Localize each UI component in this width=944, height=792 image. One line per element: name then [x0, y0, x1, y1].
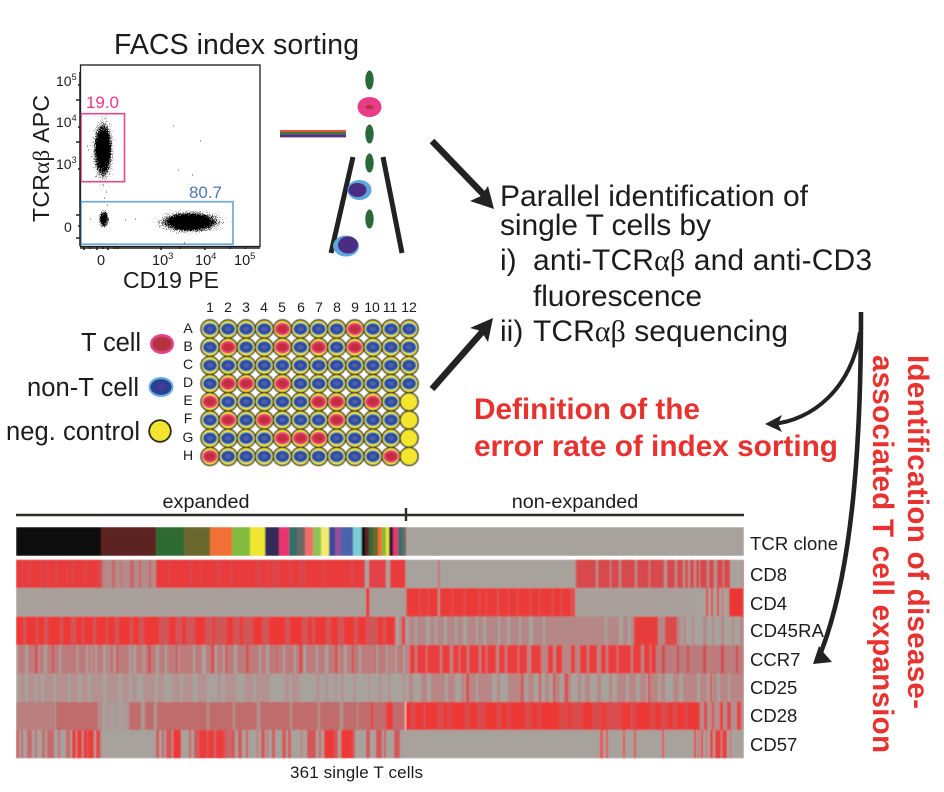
- legend: T cell: T cell: [81, 329, 141, 357]
- gate: T cells: [81, 114, 124, 182]
- plate row letters: E: [183, 392, 193, 408]
- expansion bracket: [16, 491, 744, 521]
- identification text block: anti-TCRαβ and anti-CD3: [533, 244, 872, 277]
- legend: [6, 329, 174, 446]
- plot frame: [80, 65, 260, 246]
- x axis tick labels: [97, 251, 255, 269]
- plate row letters: A: [183, 320, 193, 336]
- plate row letters: D: [183, 374, 193, 390]
- red heading: error rate: error rate of index sorting: [474, 430, 838, 463]
- plate column numbers: [206, 299, 417, 315]
- heatmap: [16, 560, 744, 758]
- x axis tick labels: 10: [152, 253, 168, 269]
- laser beam: [280, 130, 346, 137]
- axis ticks: [76, 72, 260, 250]
- plate column numbers: 8: [333, 299, 341, 315]
- heatmap row labels: CD57: [750, 734, 797, 755]
- plate column numbers: 1: [206, 299, 214, 315]
- row CD8: [16, 560, 744, 588]
- row CD57: [16, 730, 744, 758]
- identification text block: [500, 180, 872, 348]
- y axis title: TCRαβ APC: [28, 95, 54, 222]
- identification text block: single T cells by: [500, 209, 711, 242]
- arrow: plate to identification: [432, 318, 493, 389]
- label non-expanded: non-expanded: [512, 491, 638, 513]
- y axis tick labels: 5: [72, 72, 77, 82]
- identification text block: Parallel identification of: [500, 180, 809, 213]
- plate column numbers: 10: [364, 299, 380, 315]
- plate column numbers: 9: [351, 299, 359, 315]
- y axis tick labels: 10: [56, 73, 72, 89]
- row CD4: [16, 588, 744, 616]
- red heading: error rate: [474, 393, 838, 463]
- identification text block: fluorescence: [533, 280, 702, 313]
- non-T cell droplet upper: [348, 180, 372, 200]
- plate column numbers: 2: [224, 299, 232, 315]
- y axis tick labels: 0: [64, 219, 72, 235]
- T cell droplet: [358, 97, 382, 117]
- red vertical heading: Identification of disease-: [901, 355, 934, 709]
- x axis tick labels: 3: [168, 251, 173, 262]
- identification text block: ii): [500, 315, 523, 348]
- x axis tick labels: 10: [195, 253, 211, 269]
- title: FACS index sorting: FACS index sorting: [114, 29, 359, 61]
- y axis tick labels: 10: [56, 156, 72, 172]
- caption: 361 single T cells: 361 single T cells: [290, 763, 423, 782]
- heatmap row labels: CD45RA: [750, 620, 825, 641]
- plate column numbers: 5: [278, 299, 286, 315]
- stray events: [87, 126, 201, 243]
- plate row letters: B: [183, 338, 193, 354]
- plate column numbers: 6: [297, 299, 305, 315]
- 96 well plate: [183, 299, 418, 465]
- plate column numbers: 3: [242, 299, 250, 315]
- heatmap row labels: [750, 533, 838, 755]
- heatmap row labels: TCR clone: [750, 533, 838, 554]
- red heading: error rate: Definition of the: [474, 393, 700, 426]
- non-T cell droplet lower: [333, 236, 359, 256]
- x axis tick labels: 0: [97, 253, 105, 269]
- heatmap row labels: CD28: [750, 705, 797, 726]
- heatmap row labels: CD8: [750, 564, 787, 585]
- heatmap row labels: CCR7: [750, 649, 800, 670]
- legend: T cell: [81, 329, 174, 357]
- x axis tick labels: 10: [234, 253, 250, 269]
- legend: non-T cell: non-T cell: [27, 374, 139, 402]
- cell clouds: [89, 108, 234, 237]
- arrow: scatter to identification: [432, 141, 494, 209]
- plate row letters: G: [183, 429, 193, 445]
- droplets: [365, 70, 374, 228]
- row CD25: [16, 674, 744, 702]
- gate: non-T cells: [81, 202, 233, 244]
- x axis title: CD19 PE: [123, 267, 219, 293]
- plate column numbers: 7: [315, 299, 323, 315]
- plate row letters: H: [183, 447, 193, 463]
- bracket line: [16, 508, 744, 521]
- legend: negative control: neg. control: [6, 418, 140, 446]
- gate value 80.7: 80.7: [189, 183, 222, 202]
- red vertical heading: [866, 355, 934, 753]
- plate column numbers: 12: [401, 299, 417, 315]
- y axis tick labels: 10: [56, 114, 72, 130]
- plate row letters: [183, 320, 193, 463]
- row CD28: [16, 702, 744, 730]
- x axis tick labels: 5: [250, 251, 255, 262]
- curved arrow to heatmap: [813, 312, 861, 664]
- plate wells: [201, 320, 418, 465]
- y axis tick labels: 3: [72, 155, 77, 165]
- plate row letters: C: [183, 356, 193, 372]
- red vertical heading: associated T cell expansion: [866, 355, 899, 753]
- plate column numbers: 11: [383, 299, 397, 315]
- identification text block: i): [500, 244, 517, 277]
- sorter diagram: [280, 70, 402, 256]
- y axis tick labels: [56, 72, 77, 235]
- y axis tick labels: 4: [72, 113, 77, 123]
- gate value 19.0: 19.0: [86, 93, 119, 112]
- x axis tick labels: 4: [211, 251, 216, 262]
- deflection plates: [331, 157, 402, 253]
- heatmap row labels: CD4: [750, 593, 787, 614]
- row CD45RA: [16, 616, 744, 645]
- identification text block: TCRαβ sequencing: [533, 315, 788, 348]
- label expanded: expanded: [163, 491, 249, 513]
- curved arrow to error rate: [765, 332, 860, 432]
- plate column numbers: 4: [260, 299, 268, 315]
- scatter plot: [28, 65, 260, 293]
- row CCR7: [16, 645, 744, 674]
- TCR clone colour bar: [16, 527, 744, 556]
- heatmap row labels: CD25: [750, 677, 797, 698]
- plate row letters: F: [184, 410, 192, 426]
